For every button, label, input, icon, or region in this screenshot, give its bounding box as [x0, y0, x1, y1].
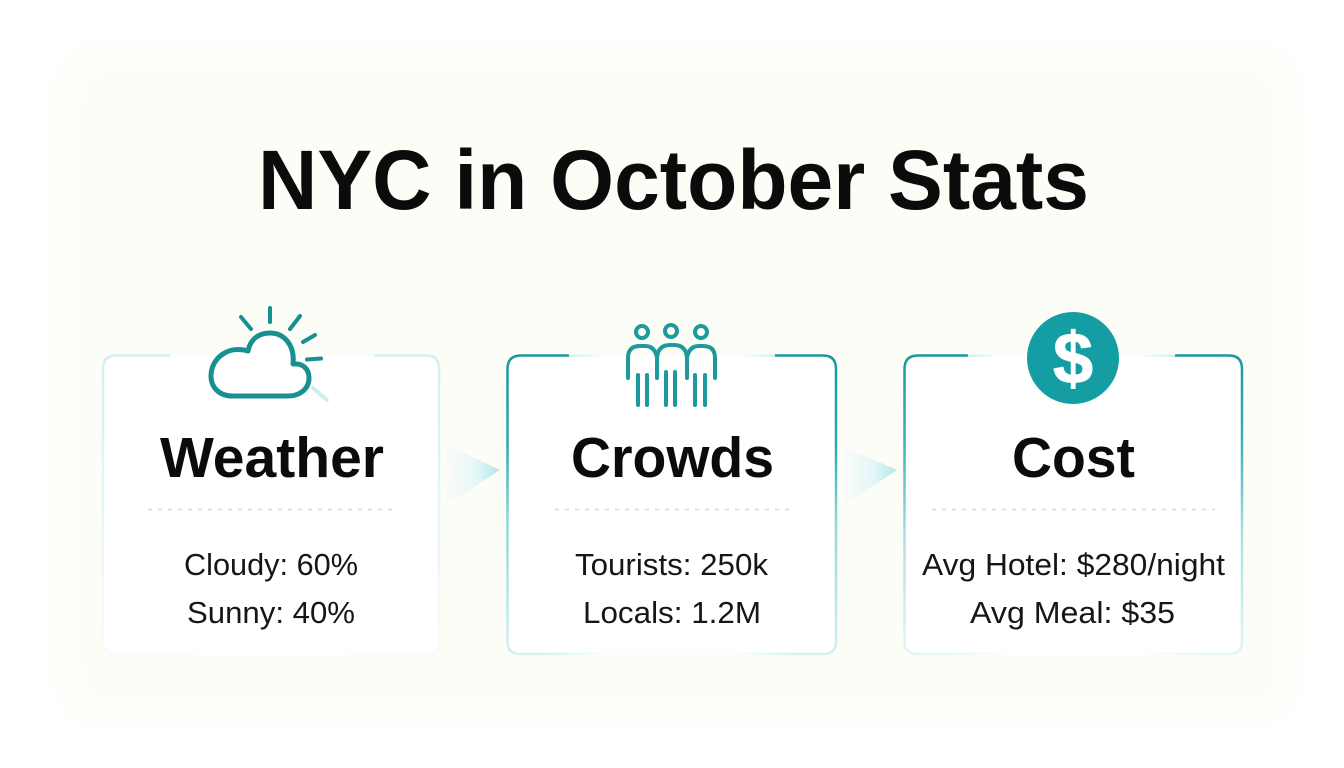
text: weather stats	[184, 547, 358, 630]
divider: cost	[932, 508, 1215, 510]
heading: weather: Weather	[160, 426, 384, 490]
icon: dollar coin: $	[1053, 319, 1093, 399]
text: cost stats: Avg Hotel: $280/night	[922, 547, 1225, 582]
text: crowds stats: Locals: 1.2M	[583, 595, 761, 630]
panel: crowds	[508, 325, 836, 656]
card outline: cost	[904, 354, 1242, 656]
card outline: weather	[103, 354, 439, 656]
arrow: weather to crowds	[443, 443, 500, 507]
heading: cost: Cost	[1012, 426, 1135, 490]
icon: dollar coin	[1027, 312, 1119, 404]
panel: cost	[904, 312, 1242, 656]
card outline: crowds	[508, 354, 836, 656]
divider: crowds	[555, 508, 792, 510]
text: weather stats: Cloudy: 60%	[184, 547, 358, 582]
text: weather stats: Sunny: 40%	[187, 595, 355, 630]
heading: crowds: Crowds	[571, 426, 774, 490]
text: crowds stats: Tourists: 250k	[575, 547, 768, 582]
text: cost stats	[922, 547, 1225, 630]
divider: weather	[148, 508, 395, 510]
arrow: crowds to cost	[840, 445, 897, 508]
icon: three people	[628, 325, 715, 405]
icon: cloud and sun	[211, 308, 327, 400]
text: cost stats: Avg Meal: $35	[970, 595, 1175, 630]
panel: weather	[103, 308, 439, 656]
title: NYC in October Stats	[258, 133, 1089, 227]
text: crowds stats	[575, 547, 768, 630]
